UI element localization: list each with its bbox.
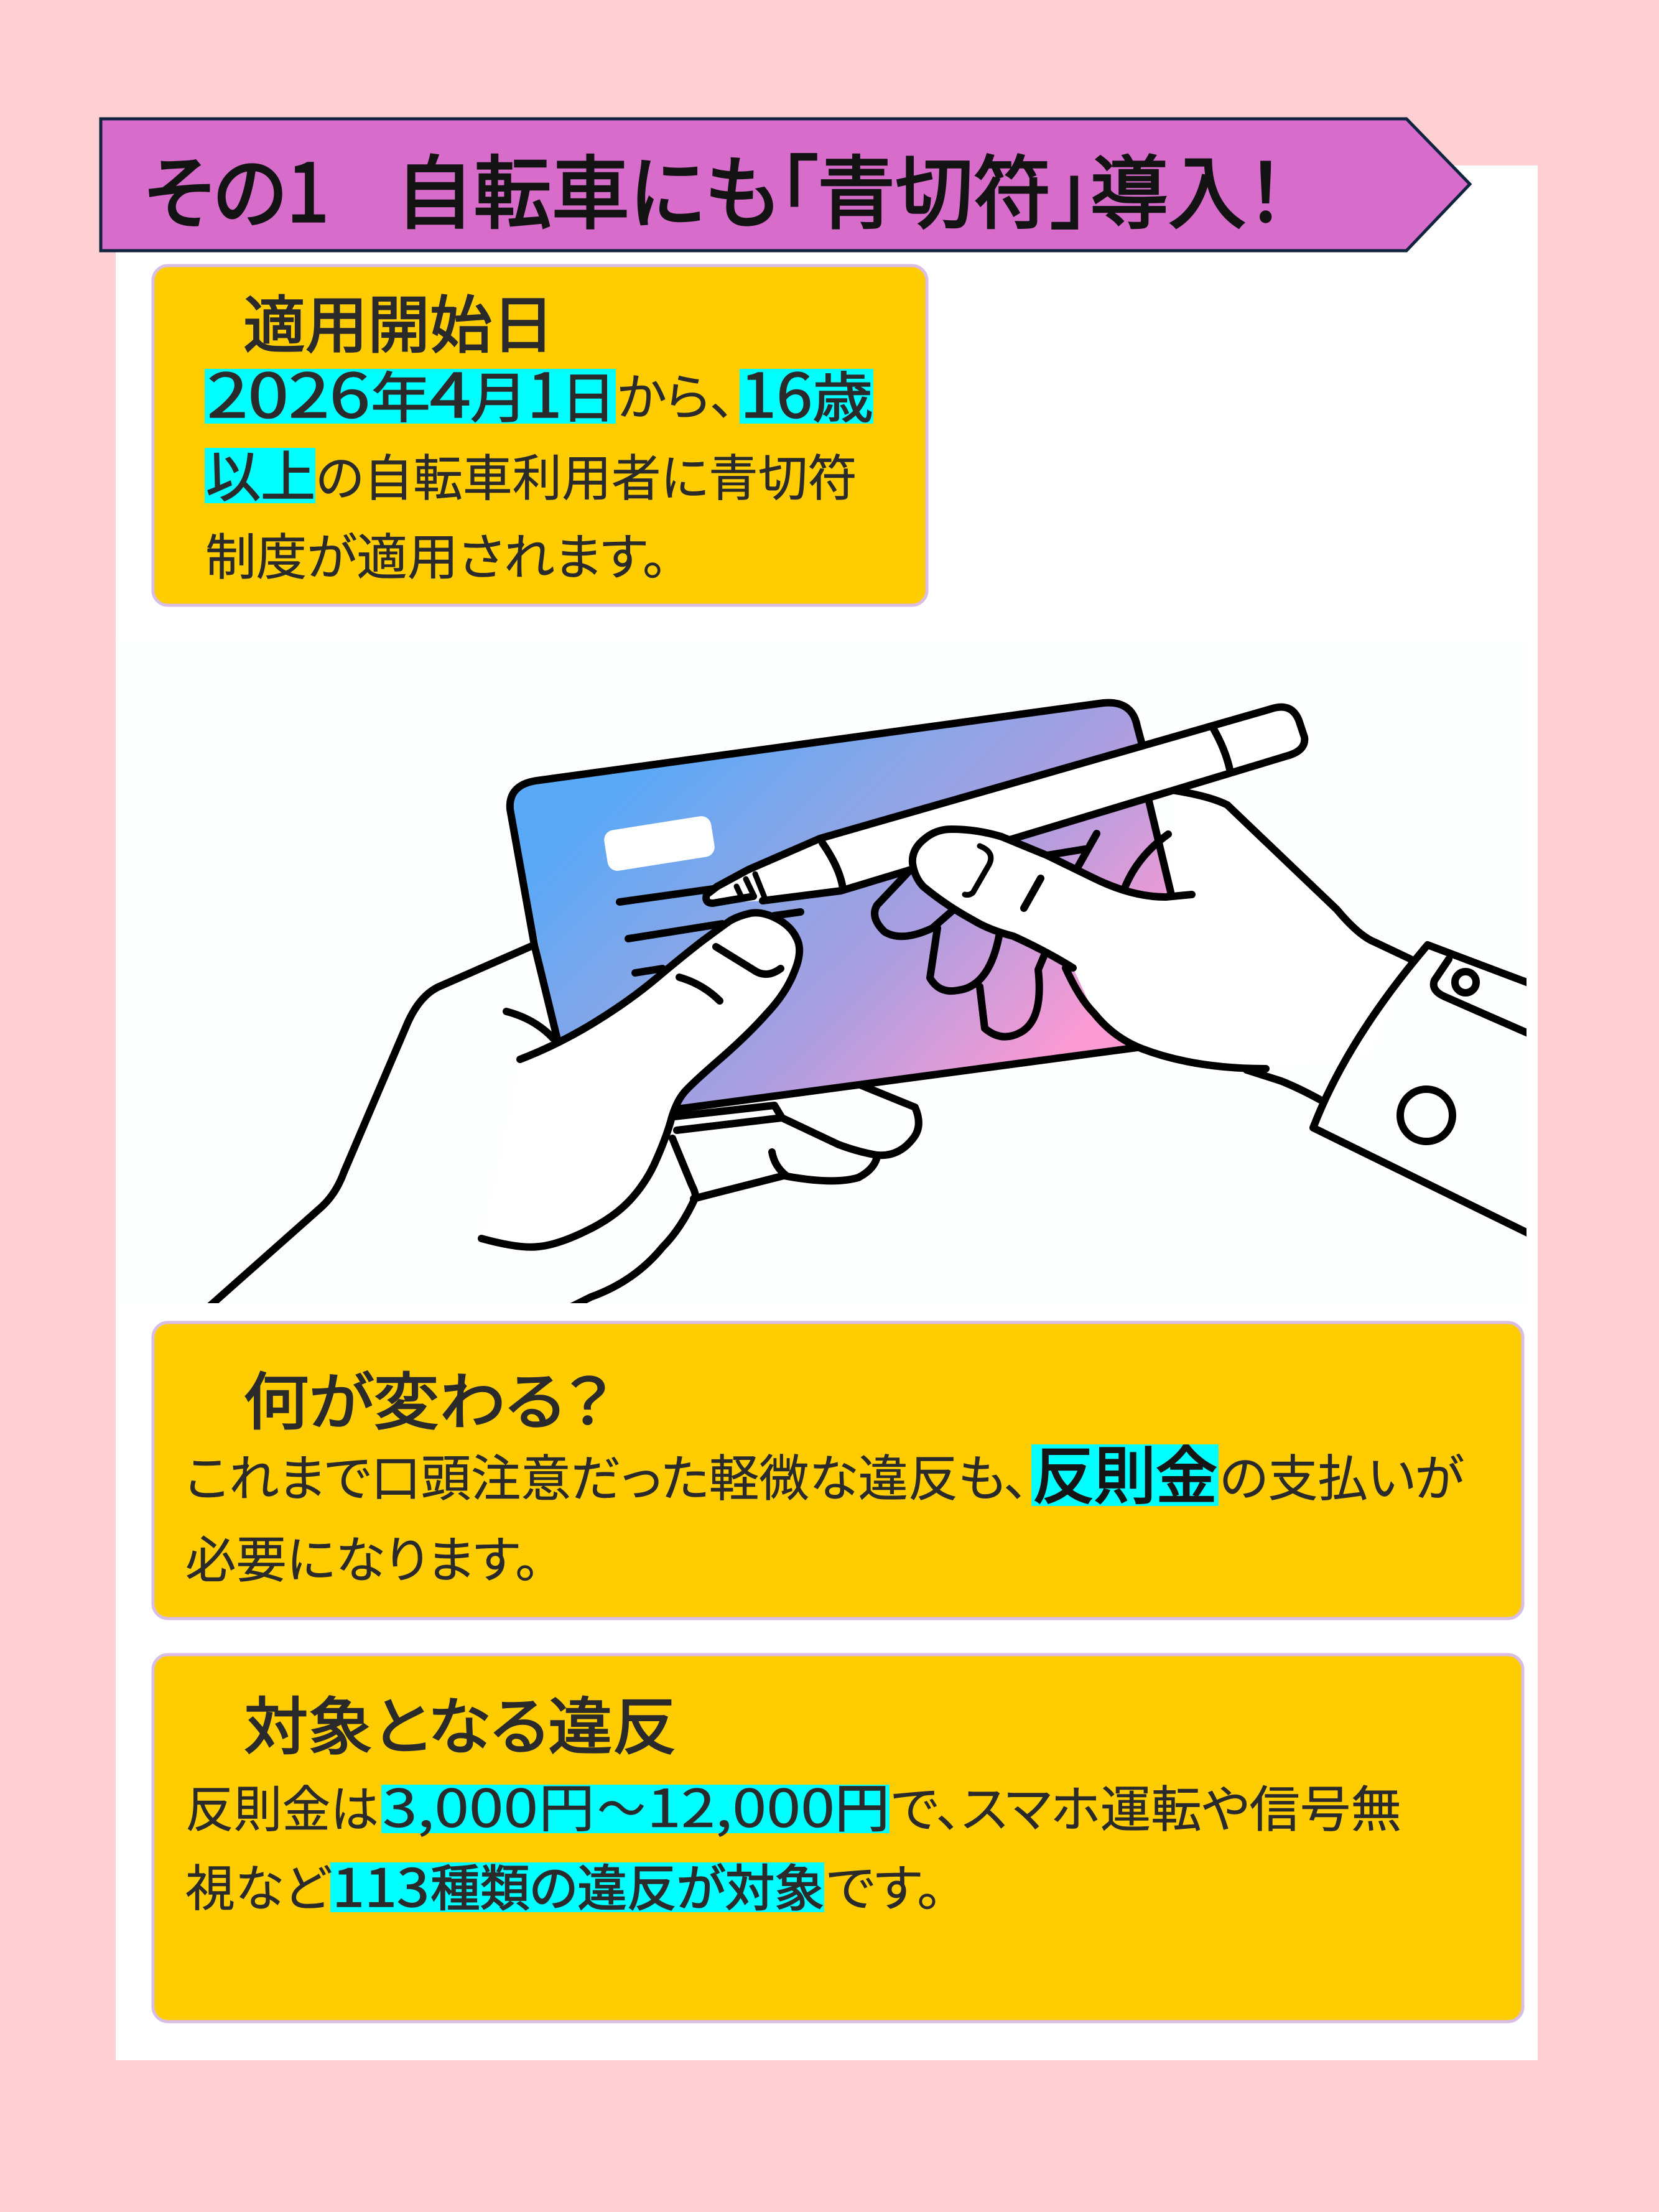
body text: date and age: 1 xyxy=(527,347,562,435)
title banner: 自転車にも「青切符」導入！ xyxy=(396,129,1285,244)
shirt cuff xyxy=(1313,945,1536,1237)
body text: what changes: これまで口頭注意だった軽微な違反も、 xyxy=(185,1439,1029,1511)
title banner xyxy=(101,119,1470,251)
title banner: その1 xyxy=(144,129,329,244)
back fingers of right hand xyxy=(875,871,1044,1037)
body text: what changes: 反則金 xyxy=(1033,1426,1217,1516)
body text: date and age: 2026 xyxy=(207,347,370,435)
heading: what changes: 何が変わる？ xyxy=(243,1352,611,1442)
body text: target violations: 反則金は xyxy=(185,1770,379,1842)
body text: target violations: 円 xyxy=(835,1767,890,1843)
body text: date and age: 制度が適用されます。 xyxy=(205,518,667,590)
heading: target violations: 対象となる違反 xyxy=(244,1676,677,1767)
body text: target violations: 円 xyxy=(539,1767,595,1843)
highlight: amount xyxy=(381,1785,890,1833)
panel: target violations xyxy=(153,1655,1523,2022)
body text: date and age: 16 xyxy=(740,347,812,435)
body text: target violations: 3,000 xyxy=(383,1767,538,1843)
body text: date and age: の自転車利用者に青切符 xyxy=(316,439,857,511)
highlight: start date xyxy=(205,369,616,424)
white content panel xyxy=(116,165,1538,2060)
card text lines xyxy=(620,888,801,973)
body text: date and age: 月 xyxy=(470,355,527,434)
body text: date and age: から、 xyxy=(617,358,735,430)
panel: application date xyxy=(153,266,927,605)
body text: target violations: で、スマホ運転や信号無 xyxy=(891,1770,1401,1842)
highlight: violation count xyxy=(330,1862,824,1912)
body text: date and age: 4 xyxy=(430,347,471,435)
body text: target violations: 種類の違反が対象 xyxy=(430,1849,824,1921)
body text: date and age xyxy=(205,347,873,590)
card xyxy=(510,703,1171,1109)
body text: target violations xyxy=(185,1767,1401,1922)
heading: application date: 適用開始日 xyxy=(243,275,554,365)
right hand xyxy=(913,791,1411,1101)
body text: what changes xyxy=(185,1426,1464,1592)
body text: date and age: 歳 xyxy=(812,355,873,434)
body text: date and age: 日 xyxy=(561,355,616,434)
card chip xyxy=(603,815,716,872)
body text: target violations: です。 xyxy=(827,1849,942,1921)
body text: date and age: 年 xyxy=(371,355,430,434)
pen xyxy=(705,707,1304,903)
highlight: fine xyxy=(1031,1444,1219,1506)
body text: target violations: ～ xyxy=(597,1770,646,1842)
illustration: hands signing a card with a pen xyxy=(207,699,1527,1303)
body text: what changes: の支払いが xyxy=(1220,1439,1464,1511)
body text: target violations: 12,000 xyxy=(647,1767,835,1843)
highlight: age xyxy=(740,369,873,424)
panel: what changes xyxy=(153,1322,1523,1619)
highlight: age continued xyxy=(205,448,315,503)
left hand xyxy=(205,913,919,1313)
body text: what changes: 必要になります。 xyxy=(185,1520,540,1592)
body text: target violations: 視など xyxy=(185,1849,332,1921)
body text: date and age: 以上 xyxy=(206,434,315,513)
body text: target violations: 113 xyxy=(332,1847,429,1922)
